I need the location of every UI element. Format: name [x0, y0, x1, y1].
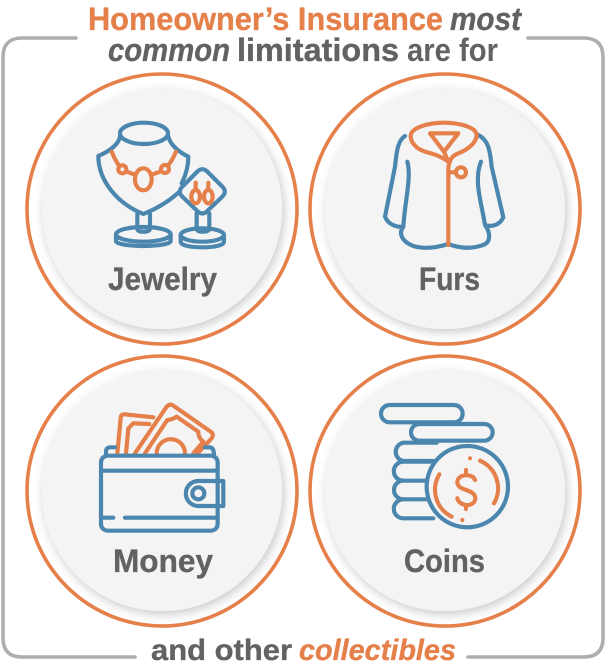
title: Homeowner’s Insurance [88, 1, 443, 37]
label: furs: Furs [419, 261, 480, 297]
title: limitations [237, 32, 399, 68]
panel: furs [310, 74, 580, 344]
footer text: collectibles [299, 634, 456, 667]
footer text: and other [151, 634, 292, 667]
panel: coins [310, 356, 580, 626]
title: most [450, 1, 522, 37]
title [88, 1, 522, 68]
label: money: Money [113, 543, 213, 579]
title: are for [407, 32, 498, 68]
icon: fur coat [385, 123, 503, 248]
footer text [151, 634, 456, 667]
title: common [108, 32, 230, 68]
label: jewelry: Jewelry [108, 261, 217, 297]
icon: coins [381, 405, 508, 527]
panel: jewelry [27, 74, 297, 344]
panel: money [27, 356, 297, 626]
label: coins: Coins [404, 543, 485, 579]
icon: wallet [101, 405, 223, 531]
icon: jewelry [98, 123, 225, 247]
